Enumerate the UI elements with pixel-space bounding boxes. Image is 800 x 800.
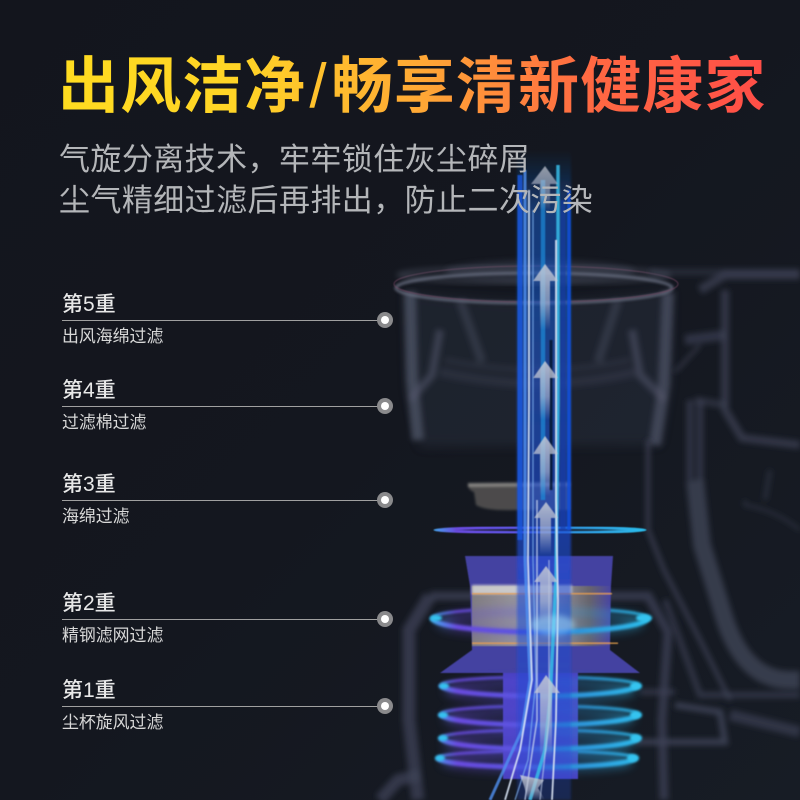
label: 第3重: 海绵过滤 [62, 507, 130, 526]
subtitle text [59, 142, 593, 218]
label: 第5重 [62, 293, 393, 346]
label: 第2重 [62, 592, 393, 645]
label: 第4重: 第4重 [62, 379, 116, 402]
handle and motor body frame [635, 272, 800, 742]
ring end highlights [430, 614, 652, 762]
subtitle text: 气旋分离技术，牢牢锁住灰尘碎屑 [59, 142, 530, 177]
label: 第3重: 第3重 [62, 473, 116, 496]
filter cap: sponge [468, 484, 570, 510]
label: 第2重: 第2重 [62, 592, 116, 615]
label: 第5重: 出风海绵过滤 [62, 327, 163, 346]
vertical airflow beam [490, 150, 575, 800]
subtitle text: 尘气精细过滤后再排出，防止二次污染 [59, 183, 593, 218]
label: 第4重: 过滤棉过滤 [62, 413, 146, 432]
air rings: front arcs [432, 528, 648, 768]
central glow at mesh [531, 615, 575, 635]
label: 第5重: 第5重 [62, 293, 116, 316]
label: 第2重: 精钢滤网过滤 [62, 626, 163, 645]
dust cup body [405, 290, 672, 447]
steel mesh filter and cone [440, 556, 640, 779]
label: 第4重 [62, 379, 393, 432]
label: 第3重 [62, 473, 393, 526]
title: 出风洁净/畅享清新健康家 [58, 52, 766, 121]
air rings: back arcs [432, 608, 648, 758]
lower cyclone housing [380, 596, 668, 800]
cup lid rings [394, 260, 678, 303]
label: 第1重: 尘杯旋风过滤 [62, 713, 163, 732]
airflow arrows [520, 166, 560, 800]
label: 第1重: 第1重 [62, 679, 116, 702]
label: 第1重 [62, 679, 393, 732]
